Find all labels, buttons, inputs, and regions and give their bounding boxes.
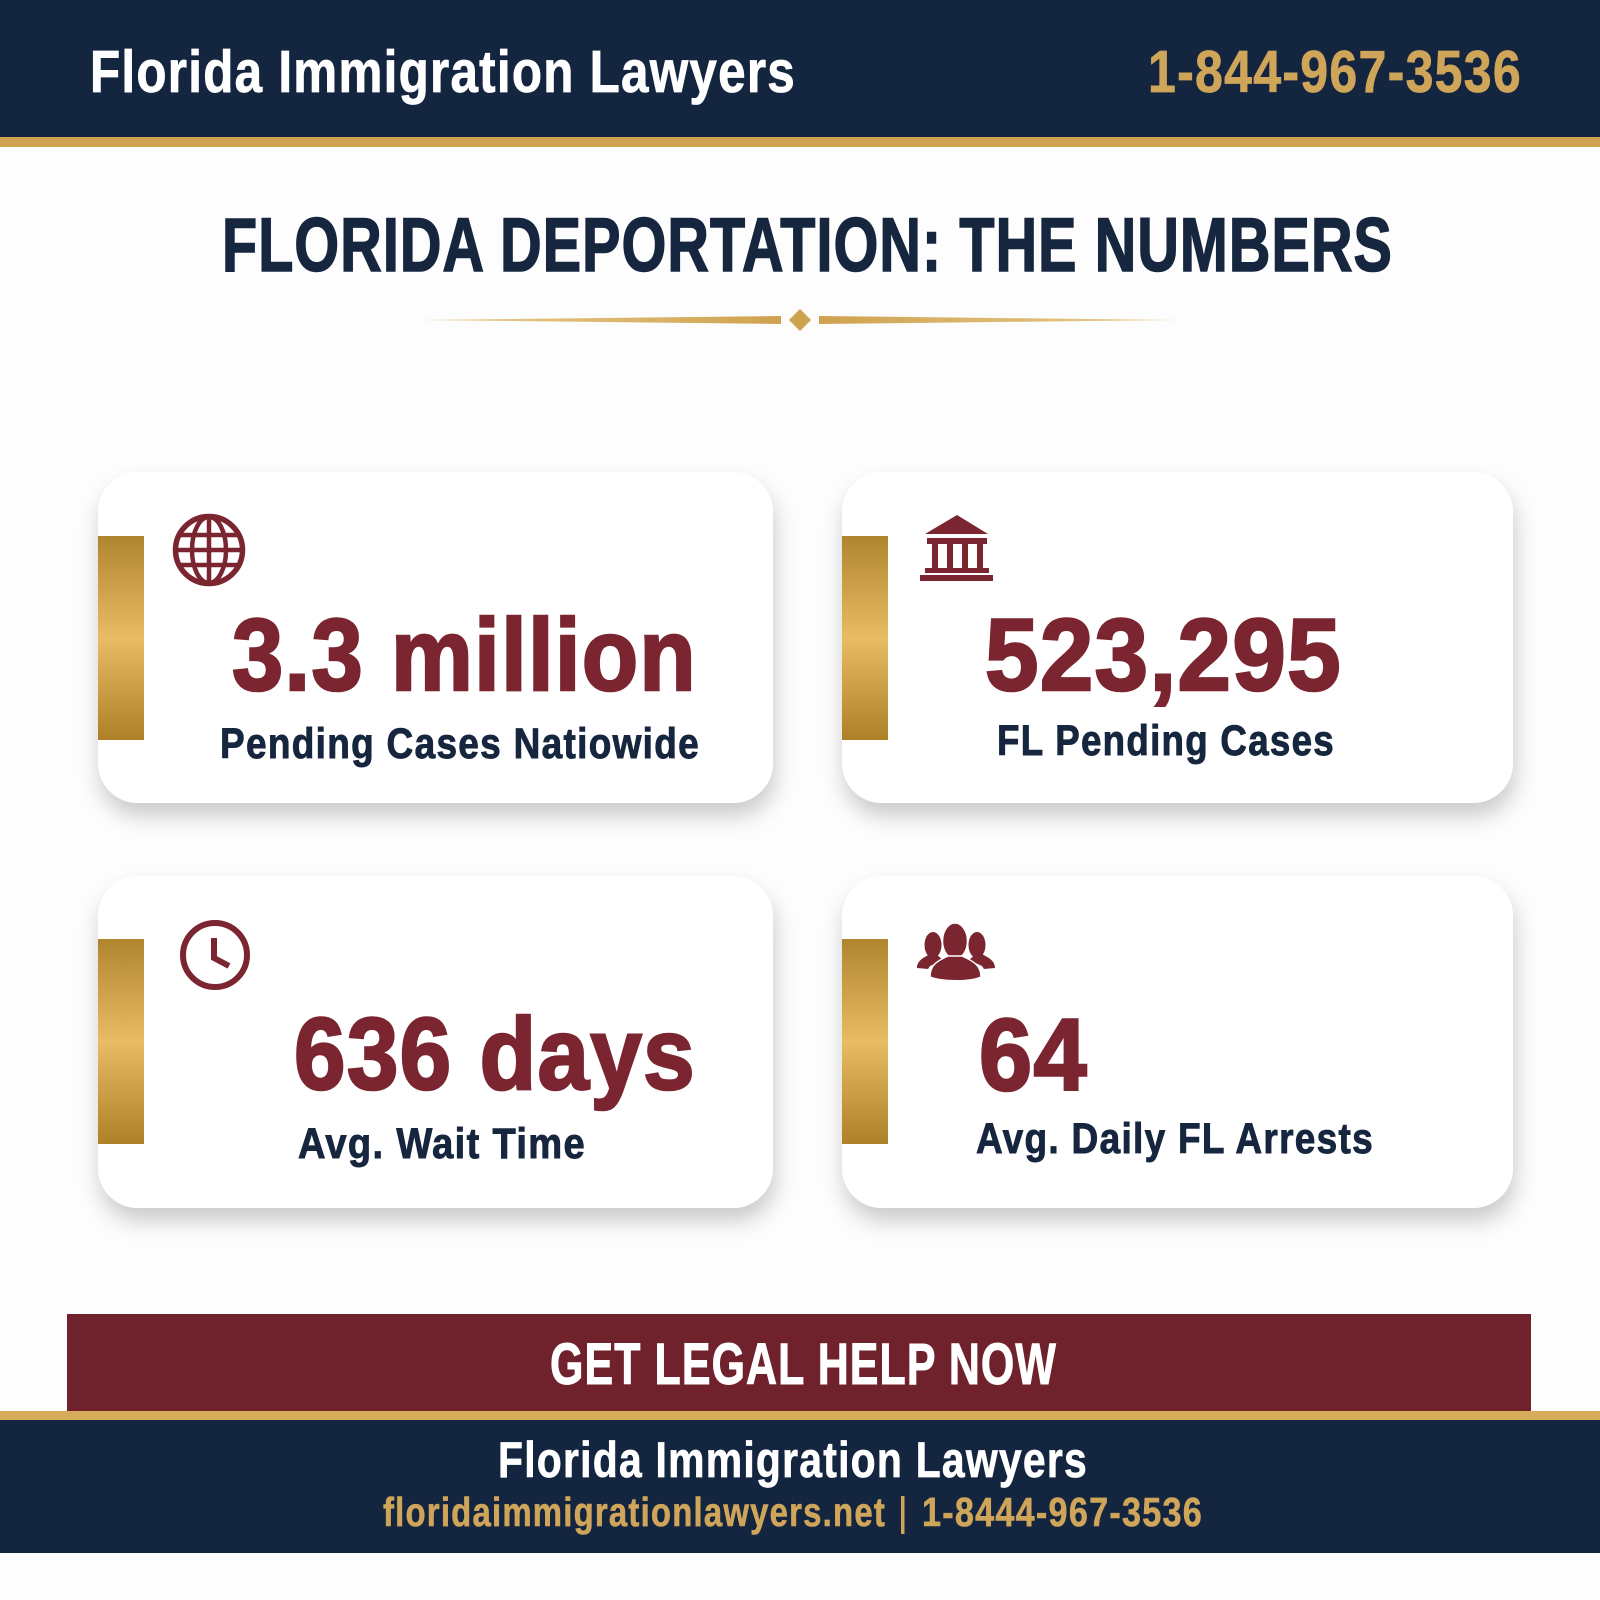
- footer separator: [901, 1496, 904, 1534]
- stat value: 523,295: [985, 598, 1342, 712]
- footer website: floridaimmigrationlawyers.net: [383, 1489, 886, 1535]
- stat label: Avg. Wait Time: [298, 1120, 586, 1168]
- footer website and phone: [383, 1489, 1203, 1535]
- header phone number: 1-844-967-3536: [1148, 39, 1522, 105]
- header bar: [0, 0, 1600, 147]
- stat label: Avg. Daily FL Arrests: [976, 1115, 1374, 1163]
- icon: clock: [183, 923, 247, 987]
- call to action banner: [67, 1314, 1531, 1412]
- panel: florida pending cases: [842, 472, 1513, 803]
- gold accent bar: [842, 536, 888, 740]
- panel: average wait time: [98, 876, 773, 1208]
- icon: courthouse: [920, 515, 993, 581]
- footer bar: [0, 1411, 1600, 1553]
- stat label: FL Pending Cases: [997, 717, 1335, 765]
- gold accent bar: [98, 939, 144, 1144]
- stat value: 64: [979, 998, 1088, 1112]
- stat label: Pending Cases Natiowide: [220, 720, 700, 768]
- header firm name: Florida Immigration Lawyers: [90, 39, 796, 105]
- gold accent bar: [842, 939, 888, 1144]
- footer firm name: Florida Immigration Lawyers: [498, 1432, 1088, 1488]
- stat value: 3.3 million: [232, 598, 697, 712]
- footer phone: 1-8444-967-3536: [922, 1489, 1203, 1535]
- icon: group of people: [917, 923, 995, 981]
- title divider with diamond: [420, 309, 1181, 331]
- panel: pending cases nationwide: [98, 472, 773, 803]
- stat value: 636 days: [294, 997, 696, 1111]
- icon: globe: [176, 516, 242, 584]
- panel: average daily arrests: [842, 876, 1513, 1208]
- call to action text: GET LEGAL HELP NOW: [550, 1332, 1057, 1397]
- gold accent bar: [98, 536, 144, 740]
